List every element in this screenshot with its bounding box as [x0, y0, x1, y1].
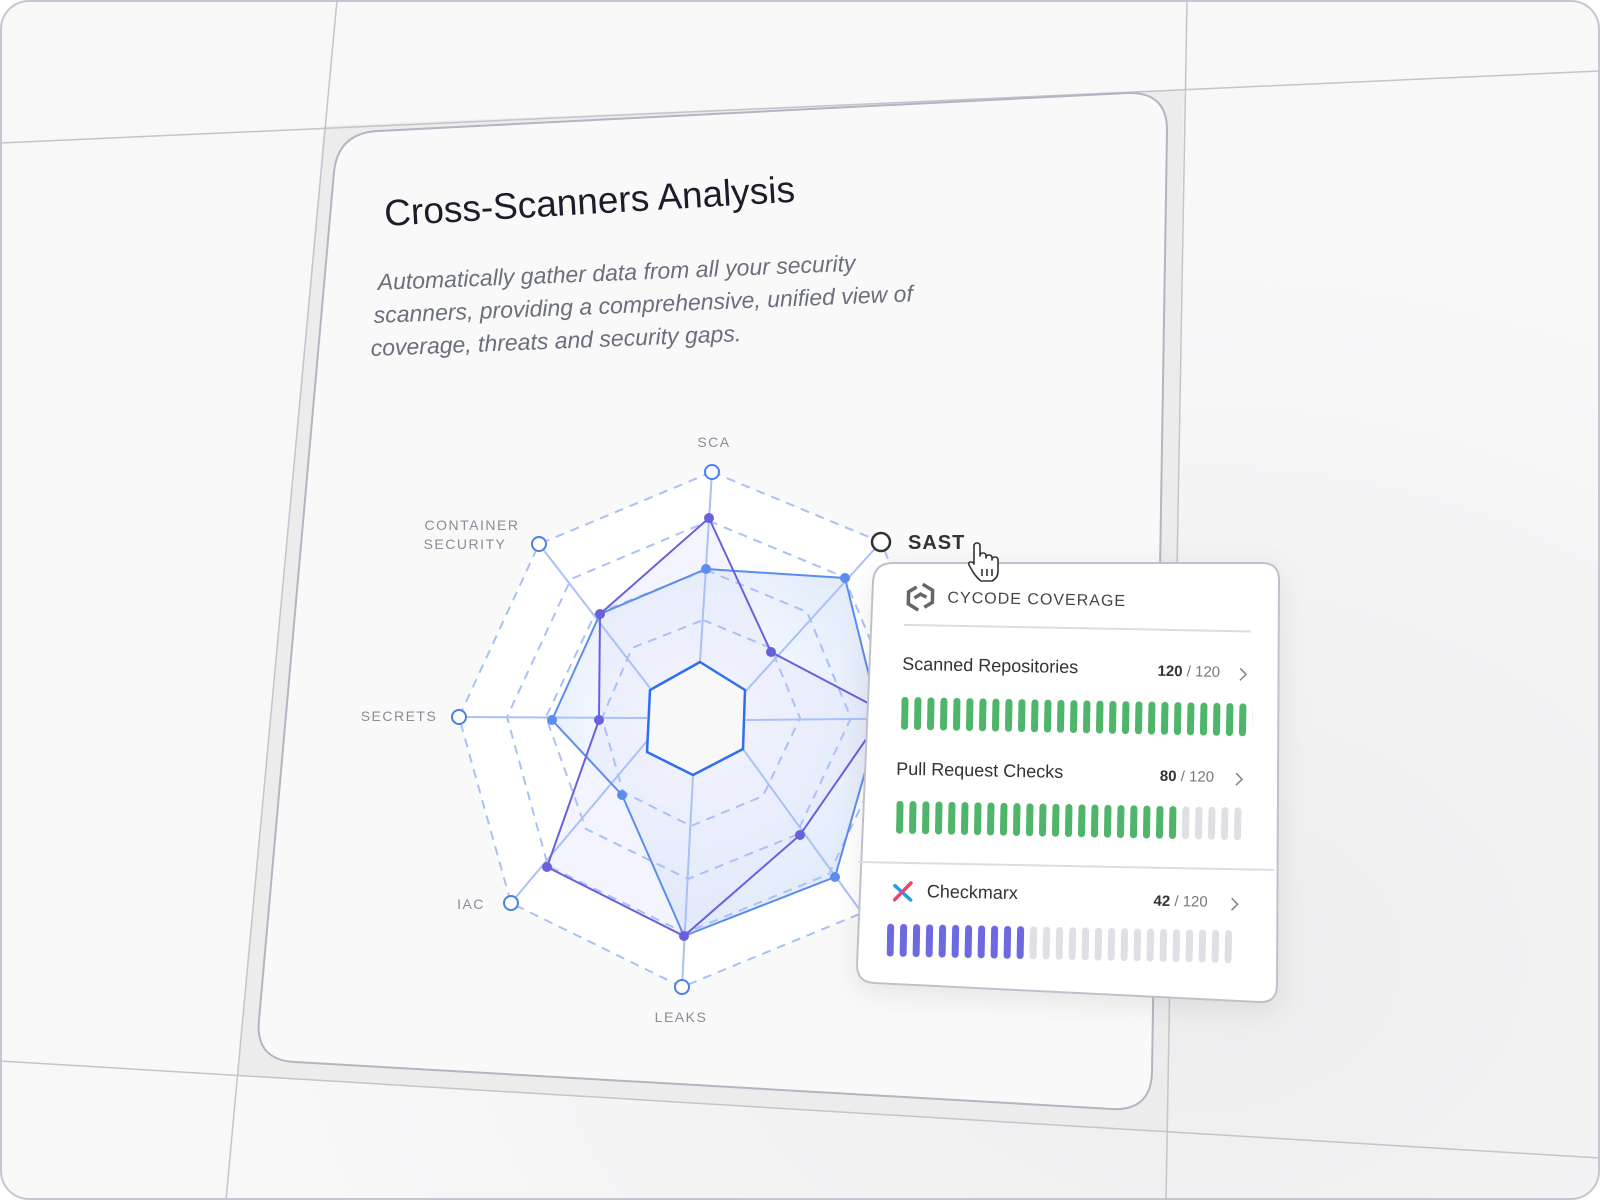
text: 120 / 120	[1157, 663, 1220, 681]
title: Cross-Scanners Analysis	[383, 169, 796, 234]
coverage panel	[857, 563, 1279, 1002]
description	[370, 250, 916, 361]
text: CYCODE COVERAGE	[947, 590, 1126, 610]
text: 42 / 120	[1153, 893, 1208, 911]
radar chart	[452, 465, 954, 994]
text: Checkmarx	[927, 881, 1018, 903]
text: 80 / 120	[1160, 768, 1214, 786]
SAST label: SAST	[908, 532, 965, 554]
icon: cursor hand	[969, 543, 998, 581]
axis labels: SECURITY	[424, 536, 506, 552]
axis labels: IAC	[457, 896, 485, 912]
axis labels: SCA	[697, 434, 731, 450]
card	[259, 93, 1167, 1109]
center grid cell	[238, 90, 1184, 1132]
text: Pull Request Checks	[896, 759, 1063, 782]
axis labels	[361, 434, 731, 1025]
logo	[908, 584, 933, 610]
description: coverage, threats and security gaps.	[370, 320, 742, 361]
axis labels: SECRETS	[361, 708, 437, 724]
axis labels: LEAKS	[655, 1009, 707, 1025]
text: Scanned Repositories	[902, 654, 1078, 677]
axis labels: CONTAINER	[425, 517, 519, 533]
checkmarx icon	[895, 883, 911, 900]
description: Automatically gather data from all your security	[375, 250, 857, 295]
description: scanners, providing a comprehensive, unified view of	[373, 280, 916, 328]
